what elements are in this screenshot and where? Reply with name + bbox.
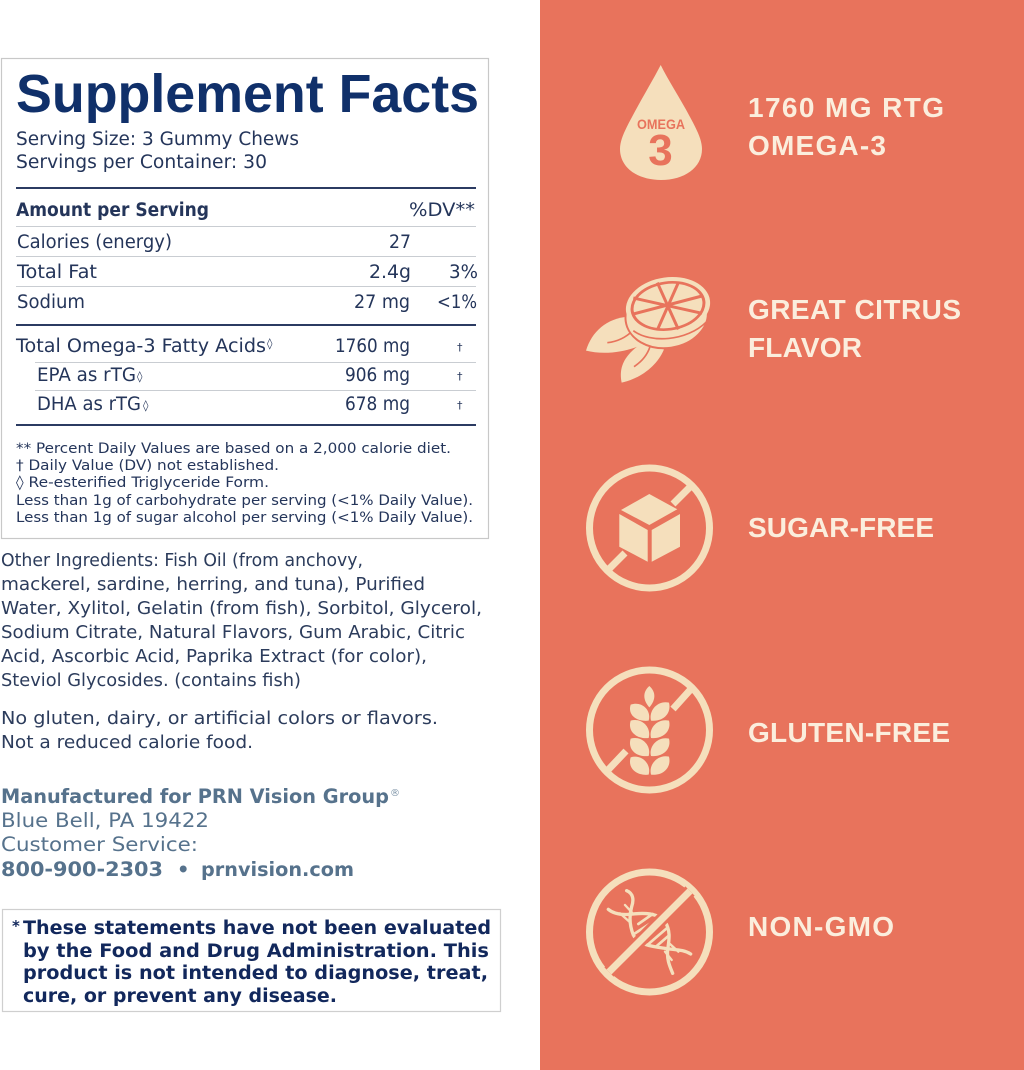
- heading: omega-3: OMEGA-3: [748, 130, 886, 161]
- table header: %DV**: [409, 200, 475, 221]
- row: EPA: †: [457, 370, 463, 383]
- allergen statement: Not a reduced calorie food.: [1, 732, 253, 753]
- row: calories: [17, 232, 411, 253]
- serving information: Serving Size: 3 Gummy Chews: [16, 129, 299, 150]
- row: sodium: 27 mg: [354, 292, 410, 313]
- table header: [16, 200, 475, 221]
- other ingredients: Steviol Glycosides. (contains fish): [1, 670, 301, 691]
- panel: benefits: [540, 0, 1024, 1070]
- manufacturer information: 800-900-2303: [1, 858, 163, 881]
- row: DHA: DHA as rTG: [37, 394, 141, 415]
- row: EPA: ◊: [137, 370, 143, 383]
- icon: omega-3 drop: 3: [648, 126, 673, 175]
- heading: citrus flavor: FLAVOR: [748, 332, 862, 363]
- FDA disclaimer box: [2, 910, 500, 1012]
- row: total omega-3: [15, 336, 463, 357]
- footnotes: ** Percent Daily Values are based on a 2,000 calorie diet.: [16, 441, 451, 457]
- footnotes: Less than 1g of carbohydrate per serving (<1% Daily Value).: [16, 493, 473, 509]
- manufacturer information: [1, 785, 400, 881]
- icon: no GMO DNA: [590, 872, 710, 992]
- footnotes: Less than 1g of sugar alcohol per serving (<1% Daily Value).: [16, 510, 473, 526]
- row: calories: 27: [389, 232, 411, 253]
- row: sodium: Sodium: [17, 292, 85, 313]
- row: total omega-3: 1760 mg: [335, 336, 410, 357]
- manufacturer information: prnvision.com: [201, 858, 354, 881]
- other ingredients: [1, 550, 482, 691]
- other ingredients: mackerel, sardine, herring, and tuna), Purified: [1, 574, 425, 595]
- row: total fat: Total Fat: [16, 262, 97, 283]
- FDA disclaimer box: These statements have not been evaluated: [23, 918, 491, 939]
- manufacturer information: •: [177, 858, 189, 881]
- row: total omega-3: †: [457, 341, 463, 354]
- heading: citrus flavor: [748, 294, 961, 363]
- serving information: [16, 129, 299, 173]
- footnotes: † Daily Value (DV) not established.: [16, 458, 279, 474]
- row: total fat: 2.4g: [369, 262, 411, 283]
- FDA disclaimer box: *: [12, 917, 20, 935]
- row: EPA: EPA as rTG: [37, 365, 136, 386]
- row: total fat: [16, 262, 478, 283]
- other ingredients: Other Ingredients: Fish Oil (from anchovy,: [1, 550, 363, 571]
- other ingredients: Water, Xylitol, Gelatin (from fish), Sorbitol, Glycerol,: [1, 598, 482, 619]
- title: Supplement Facts: [16, 64, 479, 124]
- row: total fat: 3%: [449, 262, 478, 283]
- row: total omega-3: Total Omega-3 Fatty Acids: [15, 336, 266, 357]
- manufacturer information: Blue Bell, PA 19422: [1, 809, 209, 832]
- heading: citrus flavor: GREAT CITRUS: [748, 294, 961, 325]
- icon: citrus with leaves: [586, 272, 714, 383]
- row: DHA: ◊: [143, 399, 149, 412]
- FDA disclaimer box: by the Food and Drug Administration. This: [23, 941, 489, 962]
- row: EPA: 906 mg: [345, 365, 410, 386]
- manufacturer information: Manufactured for PRN Vision Group: [1, 785, 389, 808]
- heading: gluten-free: GLUTEN-FREE: [748, 717, 950, 748]
- heading: sugar-free: SUGAR-FREE: [748, 512, 934, 543]
- allergen statement: [1, 708, 438, 753]
- icon: no gluten wheat: [590, 670, 710, 790]
- row: DHA: [37, 394, 463, 415]
- icon: no sugar cube: [590, 468, 710, 588]
- other ingredients: Sodium Citrate, Natural Flavors, Gum Arabic, Citric: [1, 622, 465, 643]
- FDA disclaimer box: product is not intended to diagnose, treat,: [23, 963, 488, 984]
- panel: supplement facts: [2, 58, 488, 538]
- row: EPA: [37, 365, 463, 386]
- other ingredients: Acid, Ascorbic Acid, Paprika Extract (for color),: [1, 646, 427, 667]
- footnotes: [16, 441, 473, 526]
- row: sodium: [17, 292, 477, 313]
- row: DHA: 678 mg: [345, 394, 410, 415]
- row: total omega-3: ◊: [267, 337, 273, 350]
- heading: non-gmo: NON-GMO: [748, 911, 894, 942]
- allergen statement: No gluten, dairy, or artificial colors or flavors.: [1, 708, 438, 729]
- heading: omega-3: 1760 MG RTG: [748, 92, 944, 123]
- heading: omega-3: [748, 92, 944, 161]
- icon: omega-3 drop: OMEGA: [637, 116, 685, 132]
- FDA disclaimer box: cure, or prevent any disease.: [23, 986, 337, 1007]
- row: DHA: †: [457, 399, 463, 412]
- manufacturer information: Customer Service:: [1, 833, 198, 856]
- icon: omega-3 drop: [620, 65, 702, 180]
- row: sodium: <1%: [437, 292, 477, 313]
- table header: Amount per Serving: [16, 200, 209, 221]
- footnotes: ◊ Re-esterified Triglyceride Form.: [16, 475, 269, 491]
- serving information: Servings per Container: 30: [16, 152, 267, 173]
- manufacturer information: ®: [390, 788, 400, 799]
- row: calories: Calories (energy): [17, 232, 172, 253]
